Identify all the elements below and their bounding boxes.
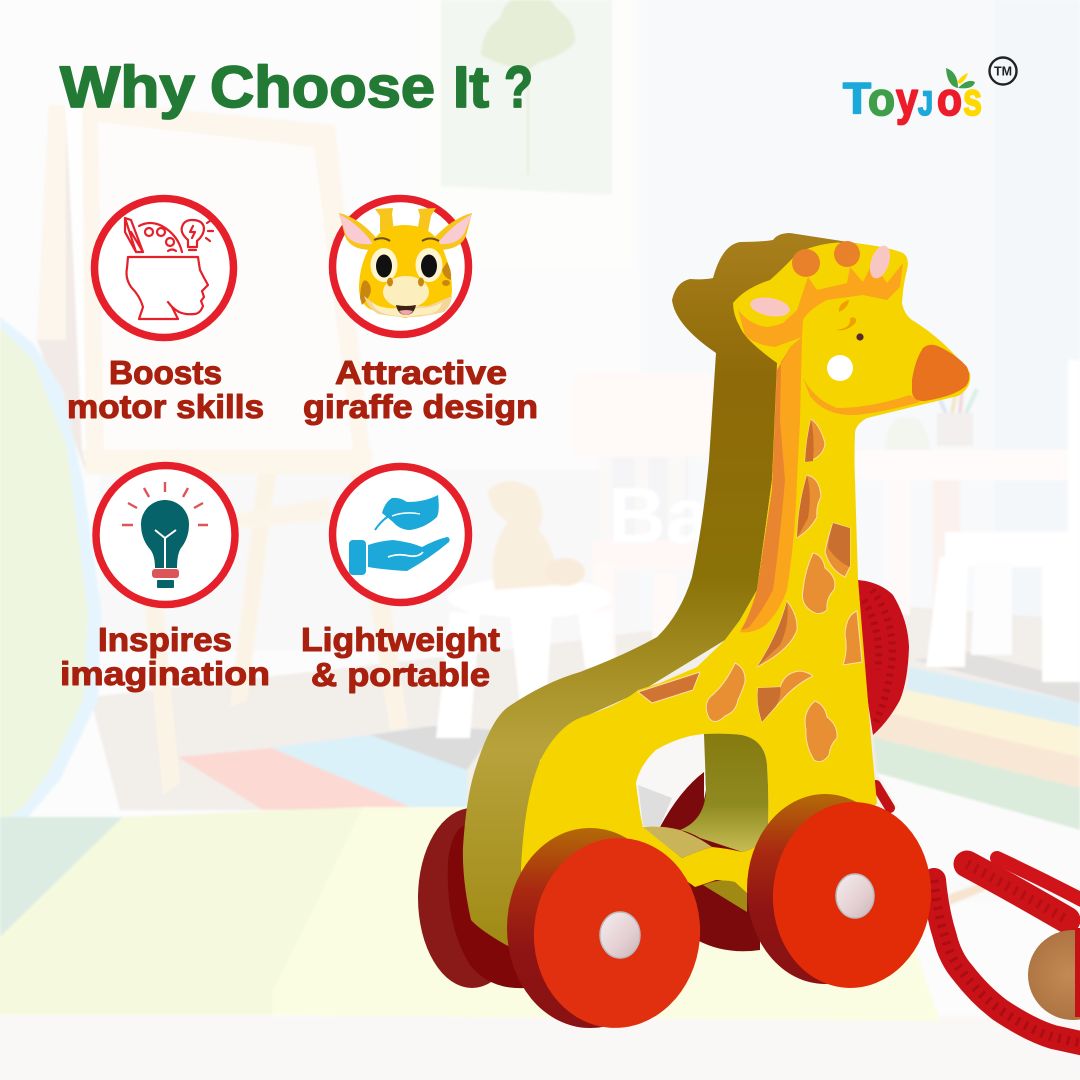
white eye spot	[827, 355, 853, 381]
right wheel hub	[836, 874, 874, 918]
label: lightweight and portable: Lightweight	[301, 621, 500, 658]
panel: attractive giraffe design	[303, 198, 538, 425]
title: ?	[504, 55, 533, 120]
faded letters on the chair: Bal	[608, 471, 732, 560]
wooden bead	[1028, 930, 1080, 1020]
icon: hand holding leaf	[332, 466, 468, 602]
wooden side thickness of body	[463, 233, 887, 950]
label: boosts motor skills: motor skills	[67, 388, 264, 425]
logo letters: J	[918, 85, 933, 123]
label: inspires imagination: Inspires	[98, 621, 232, 658]
giraffe spots	[638, 419, 862, 762]
left front wheel	[507, 828, 708, 1035]
rear left wheel	[418, 808, 526, 988]
left wheel hub	[600, 912, 640, 958]
rope to the pull bead	[876, 785, 1080, 1044]
yellow front face of giraffe	[521, 242, 970, 935]
label: lightweight and portable: & portable	[311, 656, 490, 693]
rope over bead	[1075, 928, 1080, 1017]
logo letters: T	[843, 74, 871, 123]
eye dot	[856, 333, 864, 341]
title: It	[453, 55, 489, 120]
logo leaves	[946, 68, 975, 88]
rear right wheel	[660, 772, 760, 951]
title: Why	[60, 55, 195, 120]
horn tips and pink ears	[749, 241, 894, 319]
olive underside beneath body	[703, 881, 747, 912]
logo letters: o	[868, 73, 895, 125]
label: inspires imagination	[60, 621, 270, 692]
icon: light bulb	[96, 466, 235, 604]
icon: head with ideas	[94, 198, 234, 338]
trademark badge: TM	[994, 64, 1012, 78]
braided red rope behind neck	[858, 580, 909, 735]
logo letters: o	[937, 73, 962, 125]
label: attractive giraffe design	[303, 354, 538, 425]
label: inspires imagination: imagination	[60, 655, 270, 692]
label: attractive giraffe design: Attractive	[335, 354, 507, 391]
title: Choose	[210, 55, 435, 120]
label: attractive giraffe design: giraffe design	[303, 388, 538, 425]
logo letters: s	[963, 73, 982, 125]
right front wheel	[747, 794, 937, 993]
panel: inspires imagination	[60, 466, 270, 692]
hole: view through body	[636, 734, 768, 858]
logo letters: y	[896, 73, 918, 125]
label: lightweight and portable	[301, 621, 500, 693]
panel: lightweight and portable	[301, 466, 500, 693]
panel: boosts motor skills	[67, 198, 264, 425]
label: boosts motor skills	[67, 354, 264, 425]
giraffe nose	[912, 345, 969, 401]
label: boosts motor skills: Boosts	[109, 354, 222, 391]
product: wooden giraffe pull toy	[418, 233, 1080, 1044]
orange mane and neck band	[738, 252, 920, 632]
logo: Toyjos	[843, 58, 1016, 125]
logo letters	[843, 73, 982, 125]
title	[60, 55, 533, 120]
icon: cartoon giraffe head	[332, 198, 472, 334]
trademark badge	[990, 58, 1016, 84]
